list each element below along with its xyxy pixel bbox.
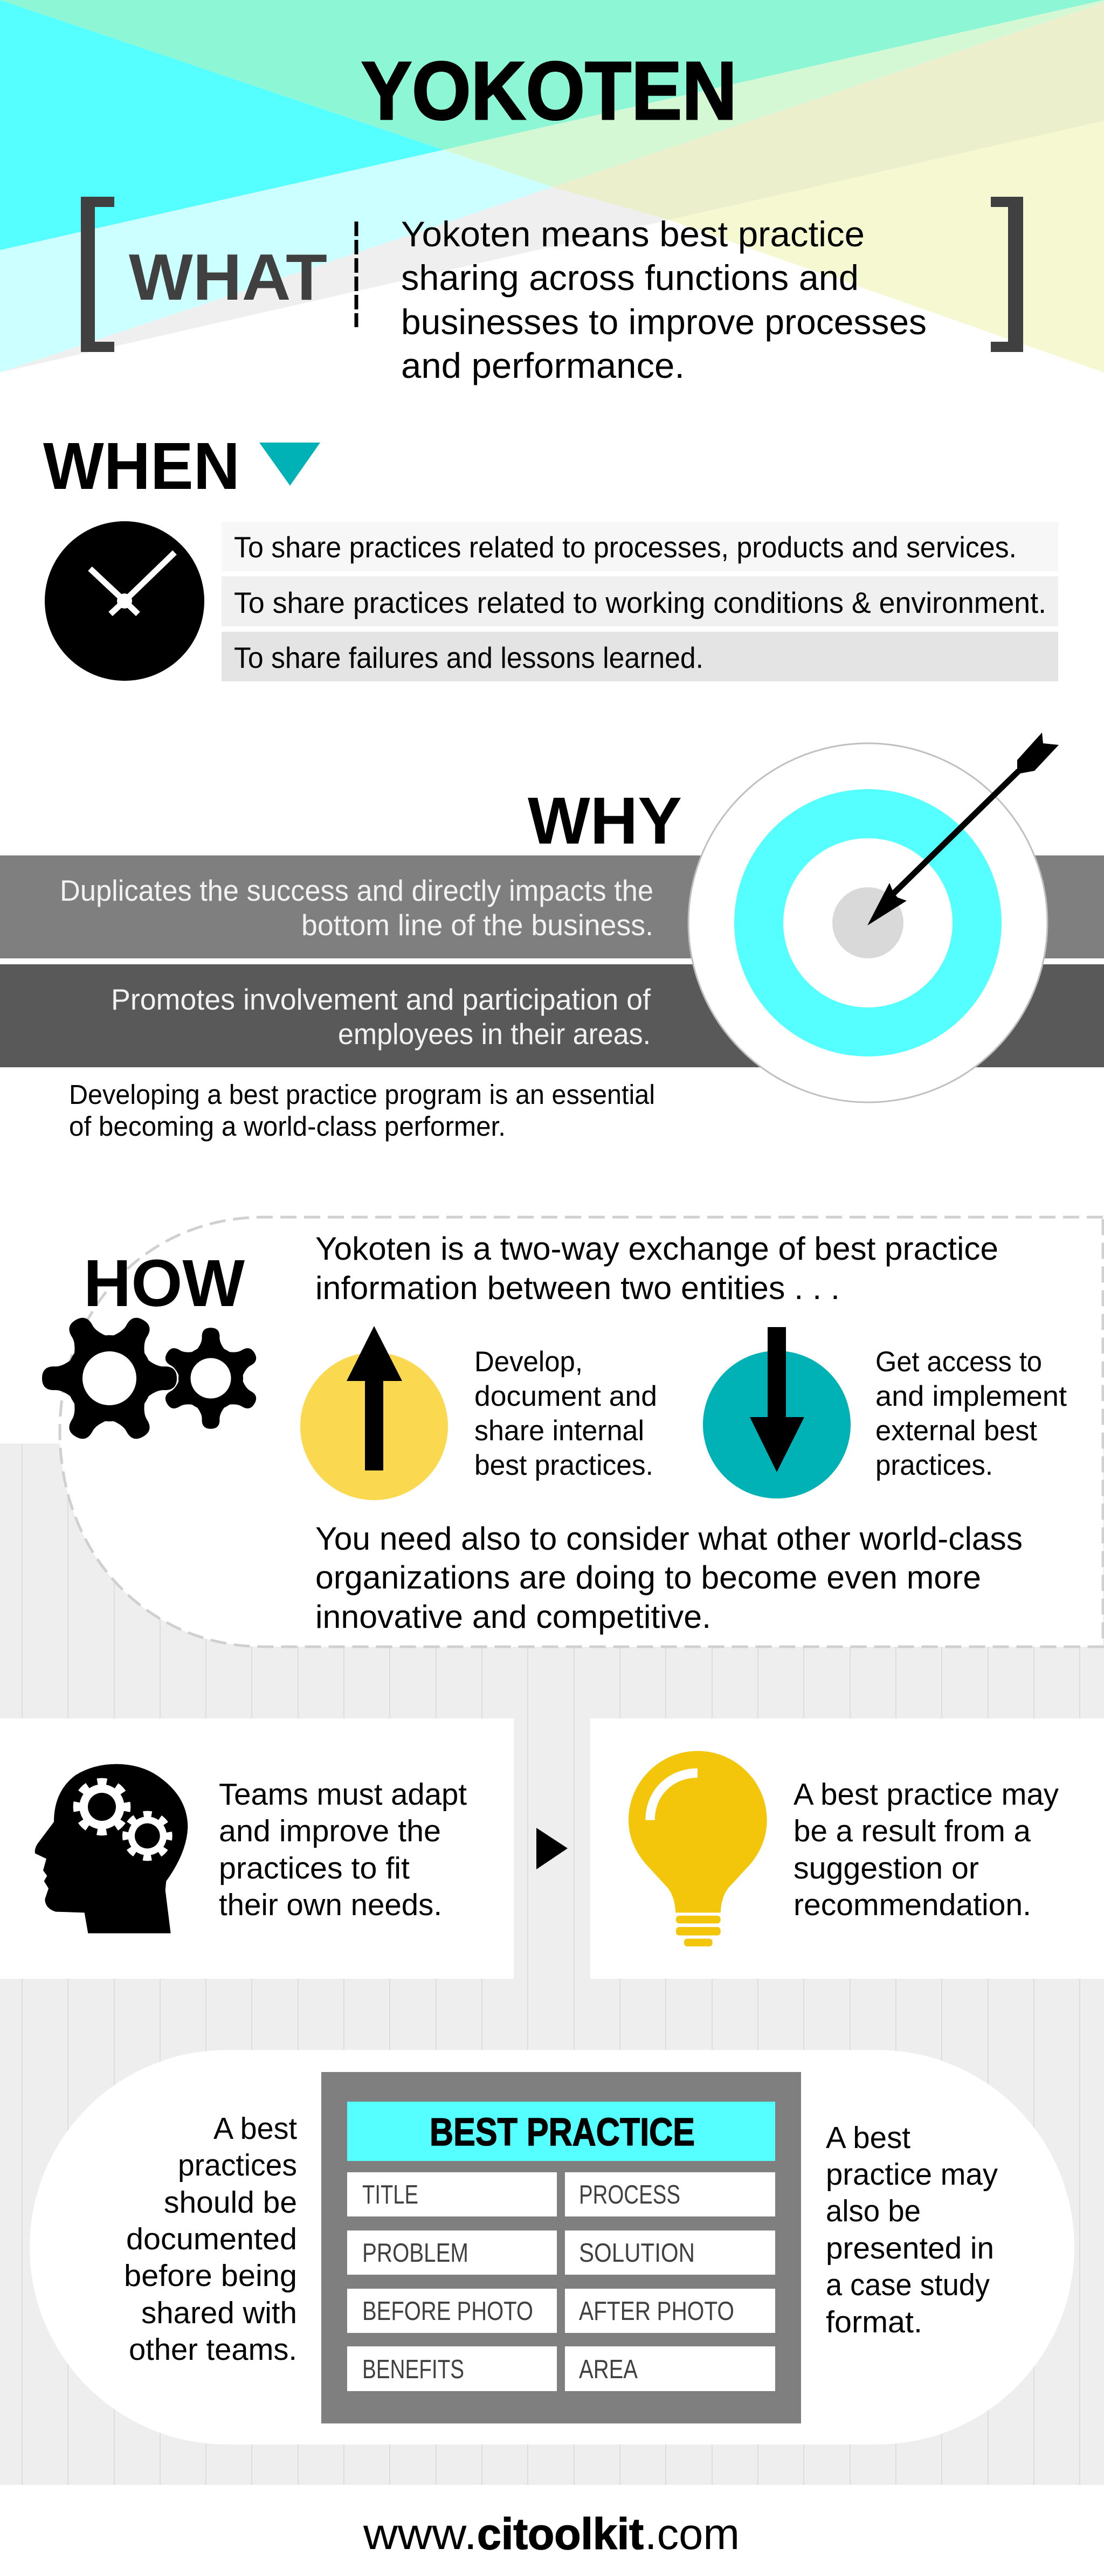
form field: before photo: BEFORE PHOTO	[362, 2297, 533, 2326]
right bracket	[991, 197, 1023, 352]
form field: benefits	[347, 2346, 557, 2391]
background: header colour triangles	[0, 0, 1104, 372]
right note text: format.	[826, 2305, 922, 2339]
what description: Yokoten means best practice	[401, 214, 865, 254]
teams text: their own needs.	[219, 1888, 442, 1922]
how heading: HOW	[84, 1247, 245, 1321]
card: teams adapt	[0, 1718, 514, 1979]
why bar 1: bottom line of the business.	[301, 908, 653, 942]
panel: how	[60, 1217, 1103, 1647]
suggestion text: recommendation.	[794, 1888, 1031, 1922]
form field: solution: SOLUTION	[579, 2239, 695, 2268]
form field: before photo	[347, 2289, 557, 2333]
form field: title: TITLE	[362, 2180, 418, 2209]
suggestion text: suggestion or	[794, 1851, 979, 1886]
teams text: and improve the	[219, 1814, 441, 1848]
internal practices text: Develop,	[474, 1346, 583, 1378]
right note text	[826, 2121, 998, 2339]
left note text: should be	[164, 2185, 297, 2220]
icon: target	[688, 743, 1047, 1102]
teams text: Teams must adapt	[219, 1777, 467, 1812]
how intro text	[315, 1231, 998, 1306]
why bar 2: employees in their areas.	[338, 1017, 651, 1051]
icon: down arrow on teal circle	[703, 1327, 851, 1498]
panel: when list	[222, 522, 1058, 681]
row 3	[222, 632, 1058, 681]
title: YOKOTEN	[361, 45, 737, 137]
teams text	[219, 1777, 467, 1922]
why note: of becoming a world-class performer.	[69, 1111, 506, 1142]
left note text: documented	[126, 2222, 297, 2256]
form field: area	[565, 2346, 775, 2391]
form field: problem	[347, 2230, 557, 2275]
icon: light bulb	[629, 1751, 767, 1946]
internal practices text: best practices.	[474, 1449, 653, 1481]
form field: after photo	[565, 2289, 775, 2333]
external practices text: and implement	[875, 1380, 1067, 1412]
row 2	[222, 576, 1058, 626]
icon: head with gears	[35, 1764, 188, 1933]
internal practices text	[474, 1346, 657, 1481]
why bar 1: Duplicates the success and directly impacts the	[60, 874, 653, 907]
how intro text: Yokoten is a two-way exchange of best practice	[315, 1231, 998, 1267]
what description: sharing across functions and	[401, 258, 859, 298]
form field: area: AREA	[579, 2355, 638, 2384]
icon: teal triangle	[259, 443, 320, 486]
left note text: shared with	[141, 2296, 297, 2330]
how closing text: innovative and competitive.	[315, 1599, 711, 1635]
suggestion text: be a result from a	[794, 1814, 1031, 1848]
right note text: practice may	[826, 2157, 998, 2192]
icon: clock	[45, 521, 204, 681]
right note text: A best	[826, 2121, 910, 2155]
right note text: presented in	[826, 2231, 994, 2266]
form field: after photo: AFTER PHOTO	[579, 2297, 734, 2326]
form field: benefits: BENEFITS	[362, 2355, 464, 2384]
best practice form	[321, 2072, 801, 2423]
footer url	[363, 2510, 740, 2559]
form field: problem: PROBLEM	[362, 2239, 468, 2268]
form field: solution	[565, 2230, 775, 2275]
external practices text: Get access to	[875, 1346, 1042, 1378]
suggestion text: A best practice may	[794, 1777, 1059, 1812]
row 3: To share failures and lessons learned.	[234, 641, 703, 674]
right note text: also be	[826, 2194, 921, 2228]
how closing text	[315, 1521, 1023, 1635]
what description	[401, 214, 927, 385]
footer url: .com	[645, 2510, 740, 2559]
panel: best practice pill	[30, 2050, 1074, 2444]
how closing text: organizations are doing to become even more	[315, 1559, 981, 1596]
left note text: before being	[124, 2259, 297, 2293]
why bar 2	[0, 964, 1104, 1067]
icon: arrow in target	[867, 733, 1059, 926]
left note text	[124, 2111, 297, 2367]
left bracket	[81, 197, 114, 352]
why bar 1	[0, 855, 1104, 958]
form field: process	[565, 2172, 775, 2216]
what description: businesses to improve processes	[401, 302, 927, 342]
icon: small gear	[158, 1328, 264, 1429]
what heading: WHAT	[129, 240, 327, 314]
left note text: other teams.	[129, 2332, 297, 2367]
right note text: a case study	[826, 2268, 990, 2302]
left note text: practices	[178, 2148, 297, 2183]
arrow between cards	[536, 1828, 568, 1869]
footer url: citoolkit	[477, 2510, 644, 2559]
footer url: www.	[363, 2510, 477, 2559]
what description: and performance.	[401, 346, 685, 385]
external practices text: practices.	[875, 1449, 993, 1481]
internal practices text: document and	[474, 1380, 657, 1412]
left note text: A best	[213, 2111, 297, 2146]
why note: Developing a best practice program is an essential	[69, 1079, 655, 1110]
row 1	[222, 522, 1058, 571]
icon: large gear	[42, 1308, 177, 1448]
external practices text: external best	[875, 1415, 1037, 1447]
icon: up arrow on yellow circle	[300, 1326, 448, 1500]
card: suggestion	[590, 1718, 1104, 1979]
why heading: WHY	[528, 784, 682, 858]
dashed separator	[355, 222, 358, 327]
suggestion text	[794, 1777, 1059, 1922]
how intro text: information between two entities . . .	[315, 1270, 840, 1306]
internal practices text: share internal	[474, 1415, 644, 1447]
row 2: To share practices related to working conditions & environment.	[234, 586, 1046, 619]
form field: title	[347, 2172, 557, 2216]
row 1: To share practices related to processes, products and services.	[234, 530, 1017, 564]
teams text: practices to fit	[219, 1851, 410, 1886]
form header	[347, 2102, 775, 2161]
why bar 2: Promotes involvement and participation of	[111, 983, 651, 1016]
how closing text: You need also to consider what other world-class	[315, 1521, 1023, 1557]
form field: process: PROCESS	[579, 2180, 680, 2209]
external practices text	[875, 1346, 1067, 1481]
background: striped grey section	[0, 1444, 1104, 2485]
why note	[69, 1079, 655, 1142]
when heading: WHEN	[43, 430, 240, 503]
panel: what	[81, 197, 1023, 385]
form header: BEST PRACTICE	[430, 2111, 695, 2154]
